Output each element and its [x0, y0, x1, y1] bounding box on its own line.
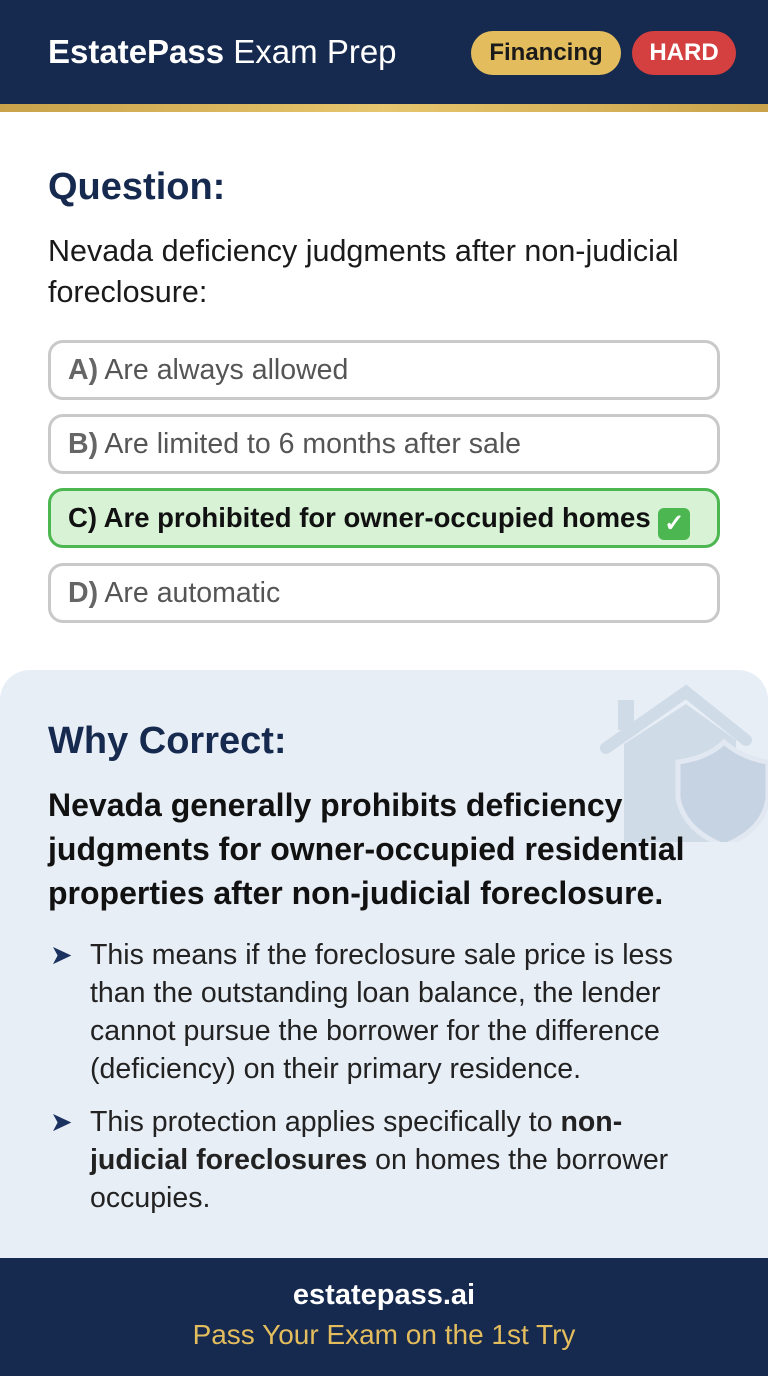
panel: explanation [0, 670, 768, 1270]
badge: Financing: Financing [489, 39, 603, 66]
option D: D) Are automatic [68, 577, 280, 609]
bullet 2: ➤ [50, 1107, 73, 1137]
option C (correct): C) Are prohibited for owner-occupied homes [68, 502, 651, 533]
footer site: estatepass.ai [293, 1279, 475, 1311]
header [0, 0, 768, 112]
option C (correct) [48, 488, 720, 548]
heading: why correct: Why Correct: [48, 720, 287, 762]
badge: Financing [471, 31, 621, 75]
footer [0, 1258, 768, 1376]
option B [48, 414, 720, 474]
title: EstatePass Exam Prep [48, 33, 397, 70]
option A [48, 340, 720, 400]
option A: A) Are always allowed [68, 354, 348, 386]
bullet 1: ➤ [50, 940, 73, 970]
summary statement: Nevada generally prohibits deficiency judgments for owner-occupied residential properties after non-judicial foreclosure. [48, 787, 685, 911]
option C (correct): ✓ [664, 510, 684, 537]
bullet 1: This means if the foreclosure sale price is less than the outstanding loan balance, the lender cannot pursue the borrower for the difference (deficiency) on their primary residence. [90, 939, 673, 1085]
question heading: Question: [48, 166, 225, 208]
option B: B) Are limited to 6 months after sale [68, 428, 521, 460]
icon: house with shield watermark [600, 684, 766, 842]
badge: HARD: HARD [649, 39, 719, 66]
footer tagline: Pass Your Exam on the 1st Try [193, 1319, 575, 1350]
option D [48, 563, 720, 623]
bullet 2: This protection applies specifically to non-judicial foreclosures on homes the borrower occupies. [90, 1106, 668, 1214]
badge: HARD [632, 31, 736, 75]
question text: Nevada deficiency judgments after non-judicial foreclosure: [48, 234, 679, 309]
